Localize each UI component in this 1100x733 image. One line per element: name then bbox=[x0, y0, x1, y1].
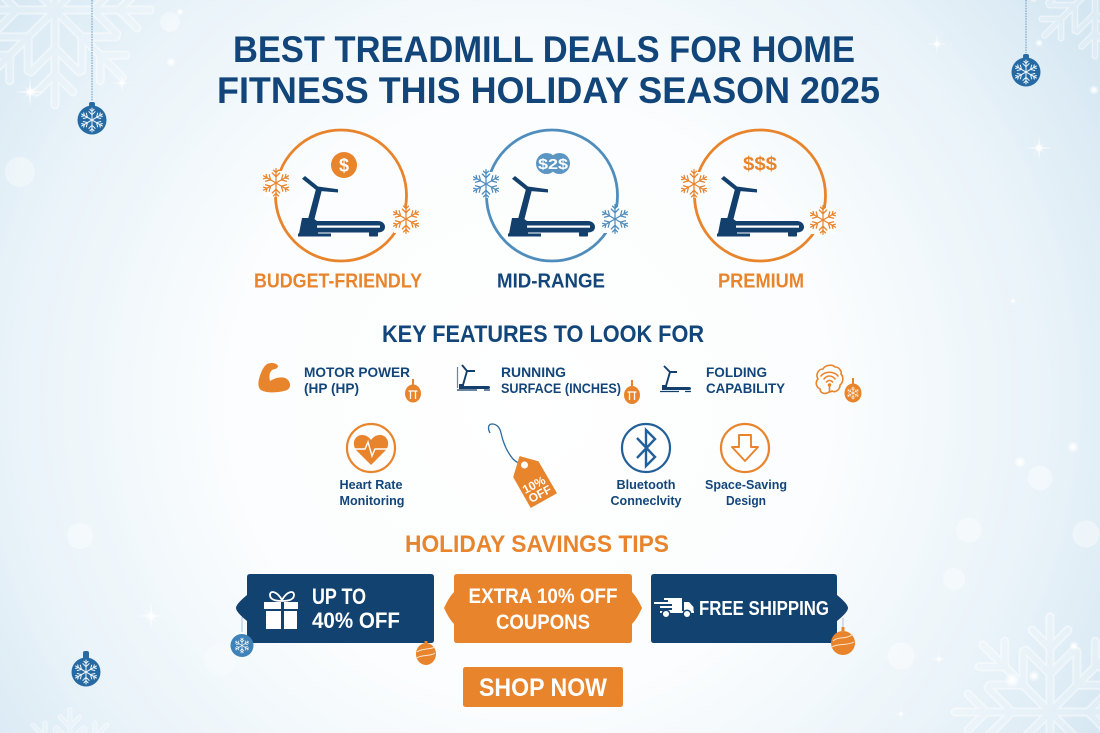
text: extra 10% off coupons: COUPONS bbox=[496, 611, 590, 634]
treadmill icon: mid-range bbox=[508, 176, 595, 236]
icon: down arrow bbox=[721, 424, 769, 472]
hanging ornament: top left bbox=[78, 0, 106, 134]
text: running surface: RUNNING bbox=[501, 364, 566, 380]
text: space-saving design: Space-Saving bbox=[705, 477, 787, 492]
text: heart rate monitoring: Monitoring bbox=[340, 493, 405, 508]
icon: delivery truck bbox=[654, 598, 694, 618]
text: free shipping: FREE SHIPPING bbox=[699, 598, 829, 620]
icon: 10% off price tag: OFF bbox=[526, 482, 554, 506]
icon: ornament bbox=[624, 380, 640, 404]
ring: mid-range bbox=[486, 130, 618, 261]
title: FITNESS THIS HOLIDAY SEASON 2025 bbox=[217, 70, 880, 111]
icon: orange ornament bbox=[831, 618, 855, 655]
text: bluetooth connectivity bbox=[610, 477, 682, 508]
icon: blue ornament bbox=[230, 617, 254, 657]
feature: bluetooth connectivity bbox=[610, 424, 682, 508]
panel: premium tier bbox=[680, 130, 837, 292]
coin: single dollar: $ bbox=[339, 156, 349, 176]
title bbox=[217, 29, 880, 111]
ring: premium bbox=[694, 130, 826, 261]
coin: single dollar bbox=[331, 152, 357, 178]
icon: heart rate bbox=[347, 424, 395, 472]
icon: gift box bbox=[264, 592, 298, 629]
button: shop now bbox=[463, 667, 623, 707]
text: folding capability: CAPABILITY bbox=[706, 380, 786, 396]
icon: folding treadmill bbox=[660, 366, 691, 392]
text: extra 10% off coupons: EXTRA 10% OFF bbox=[468, 585, 618, 608]
label: premium: PREMIUM bbox=[718, 270, 804, 292]
text: up to 40% off: 40% OFF bbox=[312, 608, 400, 633]
heading: key features: KEY FEATURES TO LOOK FOR bbox=[382, 321, 704, 348]
heading: holiday savings tips: HOLIDAY SAVINGS TIPS bbox=[405, 531, 669, 558]
button: shop now: SHOP NOW bbox=[479, 674, 607, 702]
price: premium: $$$ bbox=[743, 154, 777, 175]
feature: running surface bbox=[457, 364, 640, 404]
hanging ornament: top right bbox=[1012, 0, 1040, 86]
icon: ornament bbox=[405, 379, 421, 402]
title: BEST TREADMILL DEALS FOR HOME bbox=[233, 29, 855, 70]
text: running surface: SURFACE (INCHES) bbox=[501, 380, 621, 396]
treadmill icon: budget bbox=[298, 176, 385, 236]
panel: budget-friendly tier bbox=[254, 130, 423, 292]
text: bluetooth connectivity: Conneclvity bbox=[610, 493, 682, 508]
icon: flexed arm bbox=[258, 363, 290, 392]
text: motor power: MOTOR POWER bbox=[304, 364, 410, 380]
label: mid-range: MID-RANGE bbox=[497, 270, 605, 292]
text: folding capability: FOLDING bbox=[706, 364, 767, 380]
text: bluetooth connectivity: Bluetooth bbox=[616, 477, 676, 492]
feature: heart rate monitoring bbox=[340, 424, 405, 508]
text: heart rate monitoring: Heart Rate bbox=[340, 477, 402, 492]
banner: free shipping bbox=[651, 574, 855, 655]
text: extra 10% off coupons bbox=[468, 585, 618, 634]
text: running surface bbox=[501, 364, 621, 396]
text: space-saving design: Design bbox=[726, 493, 766, 508]
coins: mid-range price: $2$ bbox=[538, 156, 569, 173]
text: heart rate monitoring bbox=[340, 477, 405, 508]
feature: folding capability bbox=[660, 364, 786, 396]
icon: bluetooth bbox=[622, 424, 670, 472]
label: budget-friendly: BUDGET-FRIENDLY bbox=[254, 270, 423, 292]
feature: space-saving design bbox=[705, 424, 787, 508]
icon: smart brain with wifi bbox=[816, 365, 843, 393]
panel: mid-range tier bbox=[472, 130, 629, 292]
text: space-saving design bbox=[705, 477, 787, 508]
treadmill icon: premium bbox=[717, 176, 804, 236]
icon: 10% off price tag: 10% bbox=[520, 473, 548, 497]
text: folding capability bbox=[706, 364, 786, 396]
icon: running surface treadmill bbox=[457, 365, 490, 390]
icon: ornament bbox=[844, 378, 862, 402]
hanging ornament: bottom left bbox=[72, 651, 100, 686]
banner: extra 10% off coupons bbox=[444, 574, 642, 643]
coins: mid-range price bbox=[536, 153, 570, 174]
icon: 10% off price tag bbox=[489, 424, 556, 507]
text: motor power bbox=[304, 364, 410, 396]
icon: orange ornament bbox=[416, 641, 436, 665]
text: up to 40% off: UP TO bbox=[312, 584, 366, 609]
text: motor power: (HP (HP) bbox=[304, 380, 359, 396]
banner: up to 40% off bbox=[230, 574, 436, 665]
text: up to 40% off bbox=[312, 584, 400, 633]
feature: motor power bbox=[258, 363, 421, 402]
ring: budget bbox=[276, 130, 406, 261]
